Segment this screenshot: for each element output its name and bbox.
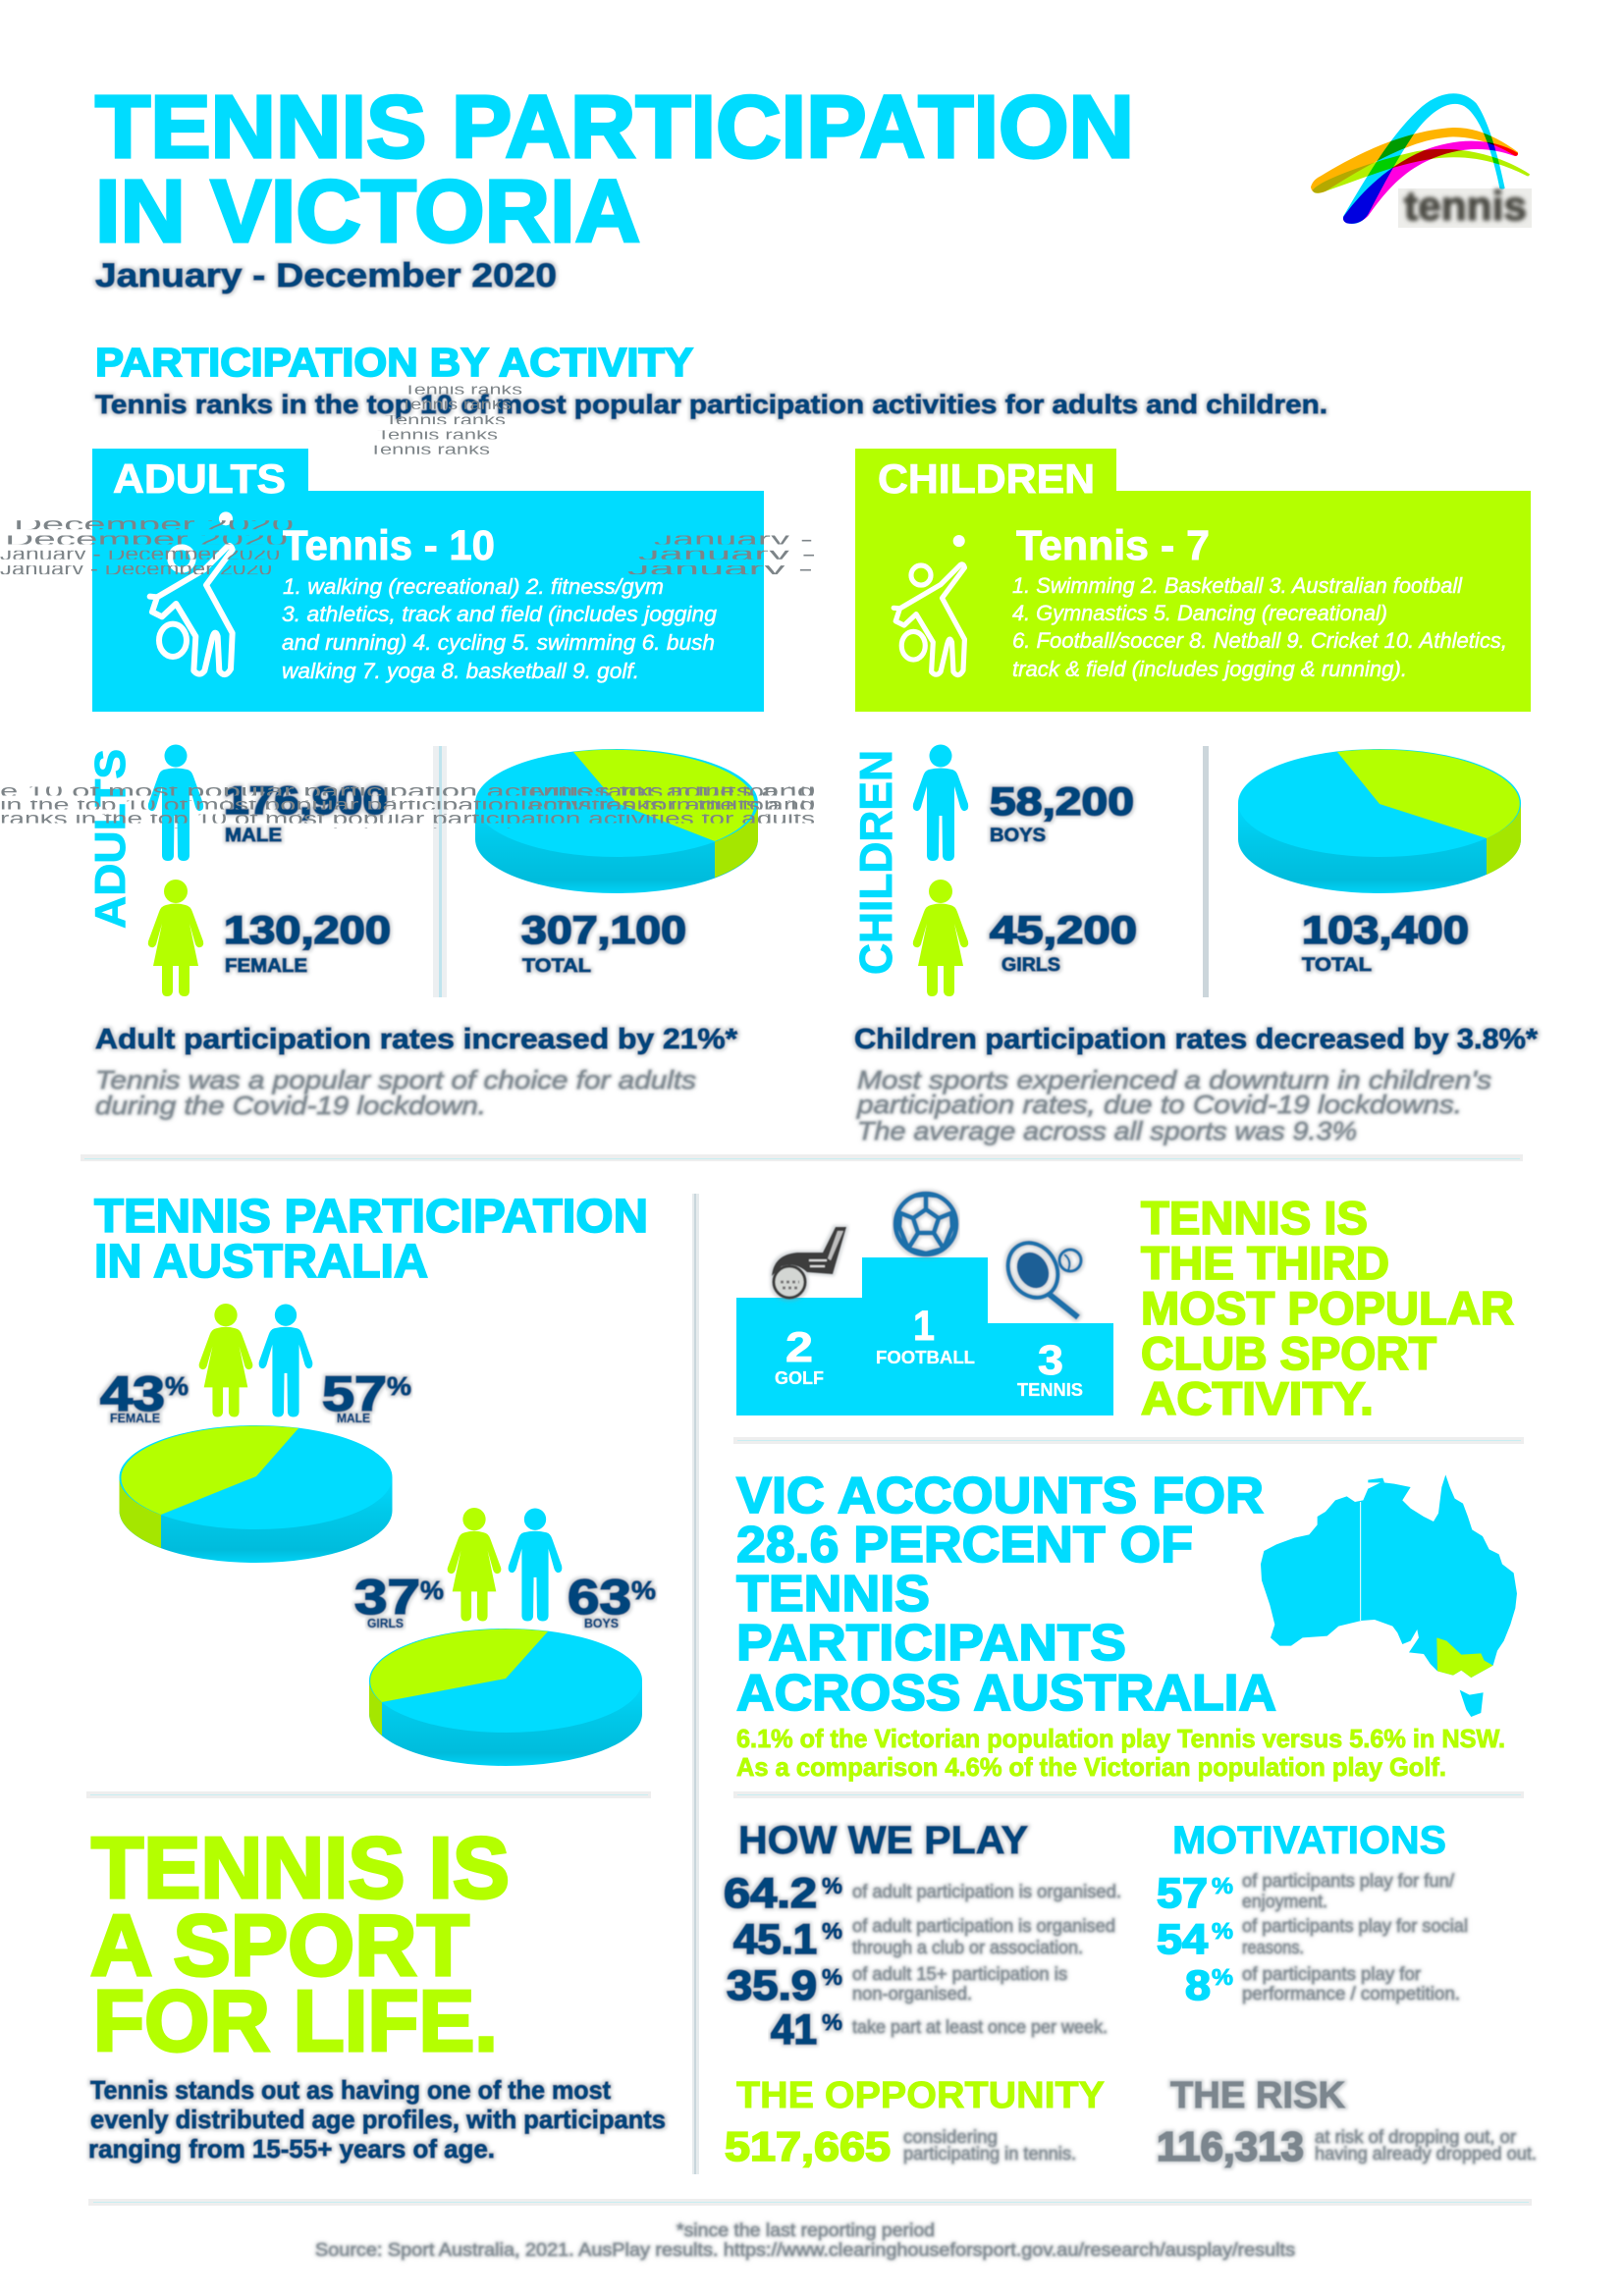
stat: 41% (771, 2006, 1108, 2054)
adults rate headline: Adult participation rates increased by 21%* (95, 1024, 738, 1055)
footer: source note: Source: Sport Australia, 2021. AusPlay results. https://www.clearinghouseforsport.gov.au/research/ausplay/results (315, 2240, 1295, 2260)
stat: 43% female: 43 (100, 1366, 165, 1421)
stat: 41%: 41 (771, 2006, 817, 2054)
pie chart: australian adults (120, 1425, 393, 1563)
heading: tennis participation in australia: TENNIS PARTICIPATION (94, 1191, 648, 1243)
children rate headline: Children participation rates decreased by 3.8%* (854, 1024, 1539, 1055)
podium label: tennis (1017, 1337, 1083, 1400)
intro sentence: Tennis ranks in the top 10 of most popular participation activities for adults and children. (95, 390, 1327, 419)
podium label: football (876, 1303, 975, 1367)
stat: opportunity: participating in tennis. (903, 2144, 1076, 2163)
stat: 64.2% (724, 1870, 1121, 1917)
panel: children (855, 449, 1531, 712)
stat: boys (990, 780, 1134, 846)
stat: 8% motivation: % (1212, 1964, 1233, 1990)
heading: vic accounts: ACROSS AUSTRALIA (736, 1665, 1276, 1722)
stat: adults female (224, 909, 391, 977)
icon: tennis player (893, 535, 965, 675)
adults activity list (282, 574, 718, 683)
stat: 45.1%: 45.1 (733, 1916, 817, 1963)
stat: 54% motivation: reasons. (1242, 1938, 1304, 1957)
stray text fragments across adults stats row: ranks in the top 10 of most popular participation activities for adults (0, 809, 815, 828)
stat: 45.1%: through a club or association. (852, 1938, 1083, 1957)
heading: third most popular club sport: CLUB SPORT (1141, 1327, 1436, 1379)
stat: 37% girls: 37 (354, 1570, 420, 1625)
heading: vic accounts: PARTICIPANTS (736, 1615, 1126, 1672)
children activity list: 4. Gymnastics 5. Dancing (recreational) (1012, 601, 1387, 625)
stray text fragments above adults panel: Tennis ranks (369, 442, 490, 458)
stat: children total: 103,400 (1302, 909, 1469, 952)
stray text fragments left of adults panel: December 2020 (14, 514, 294, 536)
stray text fragments right of adults panel: January - (638, 544, 816, 565)
adults rate explanation: during the Covid-19 lockdown. (95, 1091, 486, 1120)
stat: 57% motivation (1157, 1870, 1454, 1917)
adults activity list: 1. walking (recreational) 2. fitness/gym (283, 574, 664, 599)
stat: girls (990, 909, 1137, 976)
text: population comparison: 6.1% of the Victorian population play Tennis versus 5.6% in NSW. (736, 1724, 1505, 1753)
title: IN VICTORIA (95, 163, 640, 261)
pie chart: australian children (369, 1629, 642, 1766)
heading: the risk: THE RISK (1170, 2075, 1346, 2116)
stat: 57% motivation: enjoyment. (1242, 1892, 1327, 1911)
stat: 41%: % (822, 2009, 842, 2035)
logo: tennis (1311, 93, 1532, 229)
podium label: golf: 2 (785, 1324, 813, 1371)
children rank heading: Tennis - 7 (1016, 522, 1210, 569)
stat: 54% motivation: % (1212, 1918, 1233, 1944)
text: population comparison: As a comparison 4.6% of the Victorian population play Golf. (736, 1752, 1446, 1782)
stat: 45.1% (733, 1916, 1115, 1963)
heading: tennis participation in australia: IN AUSTRALIA (94, 1236, 428, 1288)
heading: third most popular club sport: ACTIVITY. (1141, 1372, 1374, 1424)
stray text fragments left of adults panel: December 2020 (5, 529, 288, 551)
stat: boys: 58,200 (990, 780, 1134, 824)
stat: adults total: TOTAL (522, 956, 591, 977)
title: TENNIS PARTICIPATION (95, 79, 1134, 177)
stat: 37% girls: % (420, 1575, 444, 1605)
icon: boy (913, 744, 968, 861)
stat: 37% girls: GIRLS (367, 1616, 404, 1630)
stat: opportunity: 517,665 (725, 2123, 891, 2169)
heading: tennis is a sport for life (90, 1819, 510, 2069)
stat: 8% motivation: 8 (1185, 1962, 1211, 2009)
stat: 63% boys: % (631, 1575, 656, 1605)
stray text fragments across adults stats row: Tennis ranks in the top 10 (515, 795, 815, 815)
stat: 8% motivation (1185, 1962, 1460, 2009)
stat: adults male (224, 779, 388, 846)
stat: 64.2%: % (822, 1873, 842, 1898)
stray text fragments across adults stats row: e 10 of most popular participation activities for adults and (0, 781, 815, 801)
stat: 45.1%: of adult participation is organised (852, 1916, 1115, 1936)
stat: 43% female: % (165, 1371, 189, 1401)
heading: participation by activity: PARTICIPATION BY ACTIVITY (95, 340, 693, 385)
stat: 43% female: FEMALE (110, 1411, 160, 1425)
stat: 35.9% (727, 1962, 1067, 2009)
children tab label: CHILDREN (878, 455, 1095, 502)
heading: tennis is a sport for life: FOR LIFE. (93, 1972, 498, 2069)
stray text fragments left of adults panel: January - December 2020 (0, 559, 272, 580)
stat: 35.9%: of adult 15+ participation is (852, 1964, 1067, 1984)
icon: tennis racket and ball (999, 1234, 1081, 1317)
children activity list: track & field (includes jogging & running). (1012, 657, 1407, 681)
stat: 45.1%: % (822, 1918, 842, 1944)
icon: tennis player (150, 511, 233, 674)
heading: vic accounts (736, 1468, 1276, 1722)
stat: 63% boys: 63 (568, 1570, 631, 1625)
heading: third most popular club sport (1141, 1192, 1514, 1424)
podium label: tennis: 3 (1038, 1337, 1063, 1384)
stat: 35.9%: % (822, 1964, 842, 1990)
adults rate explanation: Tennis was a popular sport of choice for adults (95, 1065, 696, 1095)
stat: opportunity: considering (903, 2127, 998, 2147)
podium: club sports (736, 1257, 1113, 1415)
stat: adults male: 176,900 (224, 779, 388, 823)
stray text fragments right of adults panel: January - (627, 559, 813, 580)
stat: 41%: take part at least once per week. (852, 2017, 1108, 2037)
children rate explanation: Most sports experienced a downturn in children's (857, 1065, 1491, 1095)
adults activity list: and running) 4. cycling 5. swimming 6. bush (282, 630, 715, 655)
children rate explanation: participation rates, due to Covid-19 lockdowns. (856, 1090, 1462, 1119)
stat: boys: BOYS (990, 826, 1046, 846)
pie chart: adults total (475, 749, 758, 893)
adults rate explanation (95, 1065, 696, 1120)
children activity list (1012, 573, 1507, 681)
adults rank heading: Tennis - 10 (283, 522, 495, 569)
footer: source note: *since the last reporting period (677, 2220, 935, 2240)
stat: 57% male (322, 1366, 411, 1425)
stat: 57% male: % (387, 1371, 411, 1401)
heading: third most popular club sport: THE THIRD (1141, 1237, 1389, 1289)
stat: 54% motivation (1157, 1916, 1468, 1963)
panel: adults (92, 449, 764, 712)
map: australia with victoria highlighted (1261, 1474, 1517, 1717)
icons: girl and boy (448, 1508, 562, 1621)
stat: 63% boys: BOYS (584, 1616, 619, 1630)
paragraph: age profile: ranging from 15-55+ years of age. (88, 2134, 495, 2163)
stat: 54% motivation: 54 (1157, 1916, 1208, 1963)
heading: tennis participation in australia (94, 1191, 648, 1288)
stat: children total (1302, 909, 1469, 976)
paragraph: age profile: evenly distributed age profiles, with participants (90, 2105, 666, 2134)
heading: the opportunity: THE OPPORTUNITY (736, 2075, 1105, 2116)
stat: 35.9%: non-organised. (852, 1984, 972, 2003)
footer: source note (315, 2220, 1295, 2260)
paragraph: age profile (88, 2075, 666, 2163)
stat: adults total (521, 909, 686, 977)
podium label: football: FOOTBALL (876, 1348, 975, 1367)
logo: tennis: tennis (1404, 183, 1527, 229)
stray text fragments left of adults panel (0, 514, 294, 580)
icon: male (148, 744, 203, 861)
stat: risk: having already dropped out. (1315, 2144, 1537, 2163)
stat: risk: at risk of dropping out, or (1315, 2127, 1516, 2147)
stat: 57% motivation: of participants play for fun/ (1242, 1871, 1454, 1891)
children activity list: 1. Swimming 2. Basketball 3. Australian football (1012, 573, 1463, 598)
icon: golf club and ball (772, 1227, 846, 1298)
pie chart: children total (1238, 749, 1521, 893)
heading: vic accounts: TENNIS (736, 1566, 930, 1623)
heading: third most popular club sport: MOST POPULAR (1141, 1282, 1514, 1334)
stray text fragments right of adults panel (627, 529, 816, 580)
heading: tennis is a sport for life: TENNIS IS (91, 1819, 510, 1916)
stat: 43% female (100, 1366, 189, 1425)
stat: 64.2%: of adult participation is organised. (852, 1882, 1121, 1901)
stat: 37% girls (354, 1570, 444, 1630)
heading: vic accounts: 28.6 PERCENT OF (736, 1517, 1193, 1574)
stat: 57% male: MALE (337, 1411, 370, 1425)
children sideways label: CHILDREN (850, 750, 901, 975)
stat: children total: TOTAL (1302, 955, 1372, 976)
heading: vic accounts: VIC ACCOUNTS FOR (736, 1468, 1264, 1524)
stat: 64.2%: 64.2 (724, 1870, 817, 1917)
icons: woman and man (199, 1304, 312, 1416)
stat: 57% motivation: 57 (1157, 1870, 1208, 1917)
stat: 35.9%: 35.9 (727, 1962, 817, 2009)
stat: adults total: 307,100 (521, 909, 686, 952)
paragraph: age profile: Tennis stands out as having one of the most (90, 2075, 611, 2105)
stray text fragments above adults panel: Tennis ranks (404, 382, 522, 399)
adults activity list: walking 7. yoga 8. basketball 9. golf. (282, 659, 639, 683)
icon: female (148, 880, 203, 996)
heading: how we play: HOW WE PLAY (738, 1819, 1028, 1862)
stray text fragments left of adults panel: January - December 2020 (0, 544, 280, 565)
subtitle: date range: January - December 2020 (95, 257, 557, 294)
adults activity list: 3. athletics, track and field (includes jogging (282, 602, 718, 626)
icon: girl (913, 880, 968, 996)
stray text fragments above adults panel: Tennis ranks (385, 412, 506, 429)
heading: third most popular club sport: TENNIS IS (1141, 1192, 1368, 1244)
adults tab label: ADULTS (113, 455, 286, 502)
children activity list: 6. Football/soccer 8. Netball 9. Cricket 10. Athletics, (1012, 628, 1507, 653)
stat: 57% motivation: % (1212, 1873, 1233, 1898)
stat: 8% motivation: of participants play for (1242, 1964, 1421, 1984)
children rate explanation: The average across all sports was 9.3% (857, 1116, 1357, 1146)
text: population comparison (736, 1724, 1505, 1782)
stat: adults female: FEMALE (225, 956, 307, 977)
podium label: tennis: TENNIS (1017, 1380, 1083, 1400)
stray text fragments across adults stats row: Tennis ranks in the top 10 (515, 781, 815, 801)
stat: adults male: MALE (225, 826, 282, 846)
stat: opportunity (725, 2123, 1076, 2169)
podium label: football: 1 (913, 1303, 935, 1350)
stat: 8% motivation: performance / competition. (1242, 1984, 1460, 2003)
stat: girls: GIRLS (1001, 955, 1060, 976)
stray text fragments above adults panel: Tennis ranks (377, 427, 498, 444)
stat: risk: 116,313 (1157, 2123, 1304, 2169)
stray text fragments above adults panel: Tennis ranks (401, 397, 512, 413)
stat: girls: 45,200 (990, 909, 1137, 952)
podium label: golf: GOLF (775, 1368, 824, 1388)
stat: 63% boys (568, 1570, 656, 1630)
stray text fragments above adults panel (369, 382, 522, 458)
stat: 57% male: 57 (322, 1366, 387, 1421)
title (95, 79, 1134, 261)
stat: adults female: 130,200 (224, 909, 391, 952)
heading: tennis is a sport for life: A SPORT (90, 1896, 469, 1994)
podium label: golf (775, 1324, 824, 1388)
icon: soccer ball (895, 1194, 956, 1255)
stat: risk (1157, 2123, 1537, 2169)
stray text fragments across adults stats row: in the top 10 of most popular participation activities for adults and (0, 795, 815, 815)
stat: 54% motivation: of participants play for social (1242, 1916, 1468, 1936)
heading: motivations: MOTIVATIONS (1172, 1819, 1446, 1862)
children rate explanation (856, 1065, 1491, 1146)
stray text fragments across adults stats row (0, 781, 815, 828)
adults sideways label: ADULTS (86, 749, 135, 929)
stray text fragments right of adults panel: January - (654, 529, 813, 551)
